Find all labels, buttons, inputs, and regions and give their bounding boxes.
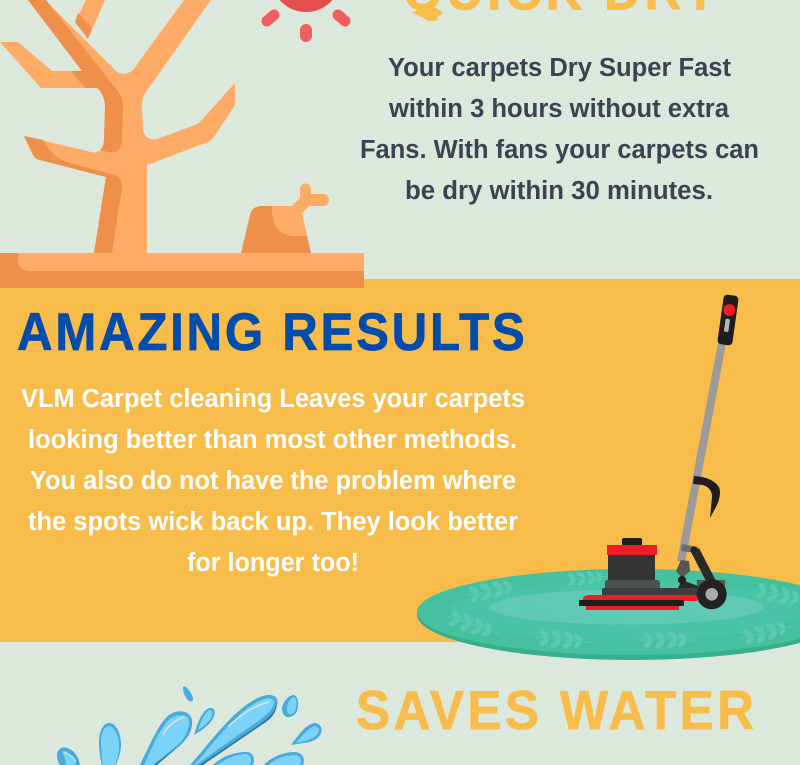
panel: amazing results band: [0, 279, 800, 642]
icon: sun: [267, 0, 345, 36]
icon: ground strip: [0, 253, 364, 288]
icon: large left droplet: [140, 711, 192, 765]
illustration: green round rug: [417, 568, 800, 660]
illustration: floor buffer machine: [579, 294, 739, 610]
icon: cord hook: [693, 476, 720, 518]
icon: tree stump: [241, 184, 329, 253]
icon: oval droplet: [99, 723, 121, 765]
icon: bare tree: [0, 0, 235, 253]
text block: amazing results description: You also do not have the problem where: [30, 467, 516, 495]
text block: quick dry description: within 3 hours without extra: [388, 95, 730, 123]
text block: quick dry description: be dry within 30 minutes.: [405, 177, 713, 205]
illustration: dry landscape: [0, 0, 364, 288]
text block: amazing results description: looking better than most other methods.: [28, 426, 517, 454]
icon: motor housing: [602, 538, 698, 596]
icon: buffer pad: [579, 595, 697, 610]
icon: wheel arm: [676, 544, 725, 596]
text block: amazing results description: VLM Carpet cleaning Leaves your carpets: [21, 385, 525, 413]
icon: wheel: [697, 579, 727, 609]
text block: quick dry description: [360, 54, 759, 205]
heading: amazing results: AMAZING RESULTS: [17, 302, 525, 361]
illustration: water splash: [57, 686, 322, 765]
icon: small teardrop droplets: [183, 686, 322, 745]
heading: saves water: SAVES WATER: [356, 680, 754, 741]
text block: amazing results description: [21, 385, 525, 577]
icon: machine pole: [681, 343, 722, 562]
text block: amazing results description: for longer too!: [187, 549, 359, 577]
icon: pole grip: [717, 294, 739, 346]
icon: lower droplets: [213, 752, 304, 765]
icon: far left droplet: [57, 747, 80, 765]
text block: quick dry description: Your carpets Dry Super Fast: [388, 54, 731, 82]
text block: amazing results description: the spots wick back up. They look better: [28, 508, 518, 536]
text block: quick dry description: Fans. With fans your carpets can: [360, 136, 759, 164]
icon: large right droplet: [190, 695, 277, 765]
